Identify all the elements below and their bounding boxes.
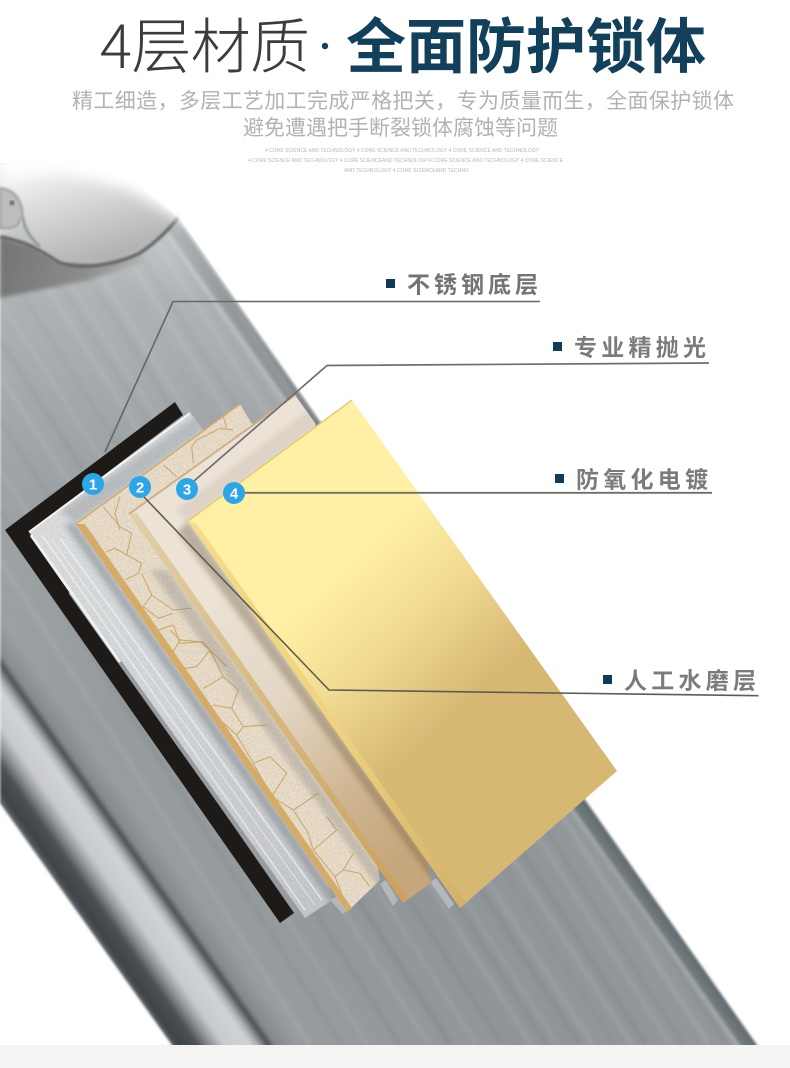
subtitle	[72, 90, 734, 140]
badge 4: 4	[230, 486, 239, 502]
title: 全面防护锁体	[346, 14, 706, 81]
crack lines, upper	[103, 417, 233, 667]
small english caption	[248, 148, 563, 174]
badge 2	[129, 476, 151, 498]
badge 4	[223, 482, 245, 504]
badge 1: 1	[89, 476, 97, 494]
crack lines, lower	[170, 630, 370, 907]
leader line: 不锈钢底层	[105, 302, 540, 452]
label: 专业精抛光: 专业精抛光	[574, 334, 706, 360]
subtitle: 避免遭遇把手断裂锁体腐蚀等问题	[243, 117, 558, 140]
layer 2: hand-ground tile sheet with cracks	[70, 400, 394, 915]
label: 不锈钢底层: 不锈钢底层	[407, 272, 538, 298]
layer 3: polished cream sheet	[129, 394, 460, 908]
leader line: 防氧化电镀	[244, 492, 712, 494]
title	[100, 0, 706, 86]
label: 防氧化电镀: 防氧化电镀	[576, 466, 708, 492]
layer: black base sheet	[5, 402, 294, 923]
badge 3	[176, 478, 198, 500]
layer 1: brushed stainless steel sheet	[28, 412, 332, 918]
bottom jagged layer shadows	[330, 878, 454, 914]
subtitle: 精工细造，多层工艺加工完成严格把关，专为质量而生，全面保护锁体	[72, 90, 734, 113]
leader line: 专业精抛光	[194, 363, 709, 481]
badge 1	[82, 473, 104, 495]
small english caption: 4 CORE SCIENCE AND TECHNOLOGY 4 CORE SCIENCE AND TECHNOLOGY 4 CORE SCIENCE AND TECHNOLOGY	[265, 148, 539, 154]
title: 4层材质	[100, 0, 310, 86]
bottom textured strip	[0, 1045, 790, 1068]
badge 3: 3	[183, 482, 191, 498]
layer 4: gold anti-oxidation plating	[188, 400, 617, 908]
shadow cast on tile	[150, 570, 394, 890]
leader line: 人工水磨层	[144, 497, 758, 696]
lock handle, blurred top-left	[0, 130, 215, 298]
label: 人工水磨层: 人工水磨层	[624, 668, 756, 694]
small english caption: 4 CORE SCIENCE AND TECHNOLOGY 4 CORE SCIENCEAND TECHNOLOGY4 CORE SCIENCE AND TECHNOLOGY 4 CORE SCIENCE	[248, 158, 563, 164]
badge 2: 2	[136, 480, 144, 496]
small english caption: AND TECHNOLOGY 4 CORE SCIENCEAND TECHNO	[344, 168, 469, 174]
